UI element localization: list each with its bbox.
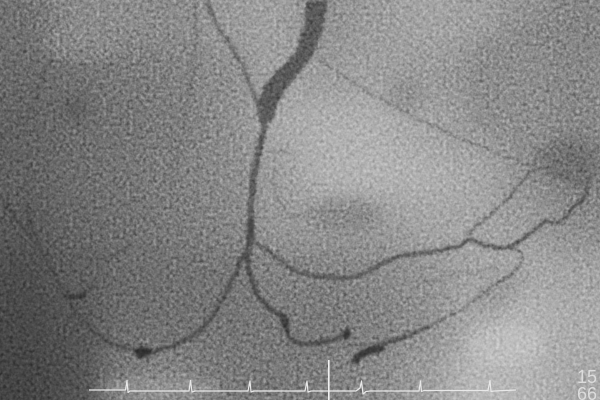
far right tip	[546, 178, 589, 224]
thin branch from trunk	[270, 152, 322, 216]
faint upper diagonal	[320, 60, 534, 167]
upper right main branch	[250, 220, 546, 278]
ecg trace	[89, 380, 516, 394]
left thin upper branch	[207, 1, 263, 118]
left thin arcs	[1, 58, 132, 260]
dark lesion at base of arc	[135, 346, 151, 358]
vertical cursor marker	[328, 360, 330, 400]
faint vertical vessel	[168, 1, 196, 195]
lower right branch	[350, 247, 522, 345]
faint branches in lower right	[405, 268, 498, 330]
main catheter vessel	[258, 0, 328, 122]
central trunk	[247, 122, 265, 258]
left descending arc	[66, 250, 245, 352]
left far branches	[1, 198, 95, 297]
right lower vessel	[247, 258, 347, 344]
diagonal branch to apex	[467, 150, 588, 234]
lower lesion	[355, 349, 381, 360]
